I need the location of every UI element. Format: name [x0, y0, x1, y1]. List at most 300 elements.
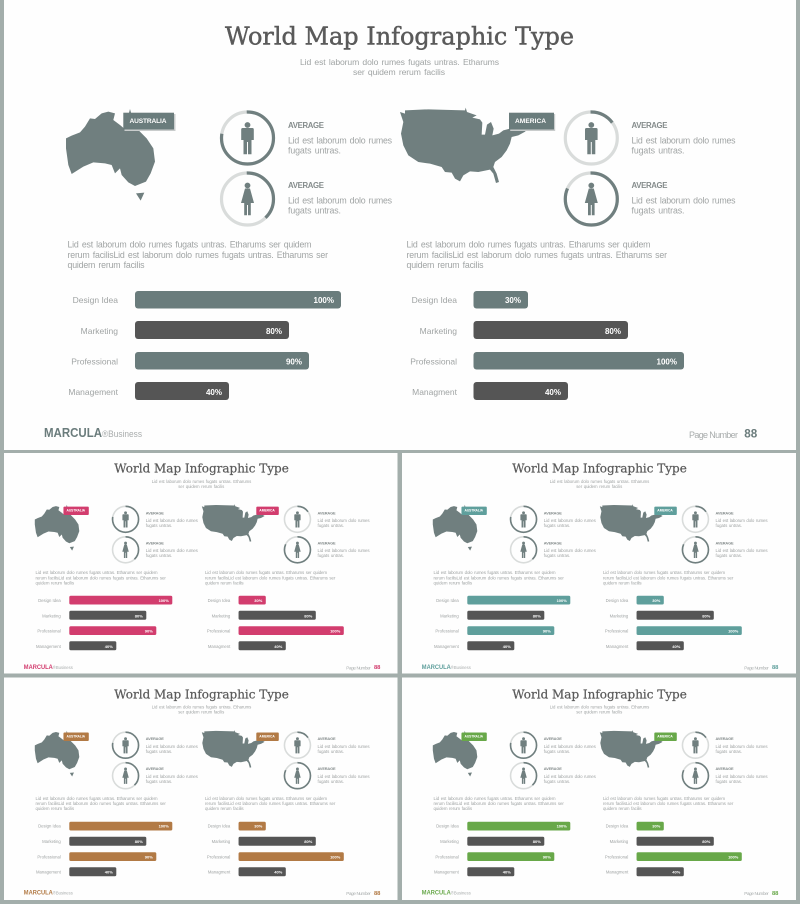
bar chart: America: 30% [254, 824, 263, 829]
bar chart: America: Managment [208, 870, 231, 875]
bar chart: America: Design Idea [412, 295, 457, 305]
paragraph: America: quidem rerum facilis [205, 806, 244, 811]
label: America: AMERICA [657, 509, 673, 513]
paragraph: America: rerum facilisLid est laborum dolo rumes fugats untras. Etharums ser [406, 250, 667, 260]
ring: female average Australia [113, 763, 139, 789]
text: female average Australia: AVERAGE [288, 181, 324, 190]
bar chart: America: 30% [652, 824, 661, 829]
text: female average Australia: AVERAGE [146, 766, 164, 771]
map: America [202, 730, 265, 768]
subtitle [152, 705, 251, 715]
paragraph: America: quidem rerum facilis [205, 580, 244, 585]
bar chart: America: 80% [605, 327, 621, 336]
text: male average America: AVERAGE [716, 510, 734, 515]
bar chart: Australia: Management [434, 644, 460, 649]
bar chart: America: 80% [304, 613, 313, 618]
text: male average America [318, 510, 370, 528]
subtitle: ser quidem rerum facilis [178, 484, 224, 489]
bar chart: America: Managment [606, 644, 629, 649]
text: male average America: AVERAGE [716, 736, 734, 741]
bar chart: Australia: Professional [37, 629, 61, 634]
paragraph: Australia: rerum facilisLid est laborum dolo rumes fugats untras. Etharums ser [36, 801, 166, 806]
bar chart: Australia: 40% [503, 870, 511, 875]
paragraph: Australia: quidem rerum facilis [36, 580, 75, 585]
text: male average Australia: AVERAGE [288, 121, 324, 130]
paragraph: Australia [68, 240, 328, 270]
bar chart: Australia: Marketing [81, 326, 118, 336]
bar chart: Australia: 80% [135, 839, 143, 844]
bar chart: Australia: 40% [503, 644, 511, 649]
map: Australia [66, 109, 155, 201]
bar chart: Australia: 90% [145, 629, 153, 634]
slide: main grey version [44, 22, 758, 441]
paragraph: America: quidem rerum facilis [603, 580, 642, 585]
text: female average America: AVERAGE [716, 540, 734, 545]
subtitle [152, 479, 251, 489]
paragraph: America: Lid est laborum dolo rumes fugats untras. Etharums ser quidem [205, 796, 327, 801]
bar chart: Australia: 80% [533, 839, 541, 844]
paragraph: Australia: rerum facilisLid est laborum dolo rumes fugats untras. Etharums ser [36, 575, 166, 580]
bar chart: America: 30% [505, 296, 521, 305]
text: male average Australia [544, 736, 597, 754]
footer page number: Page Number [689, 430, 738, 440]
title: World Map Infographic Type [512, 687, 687, 701]
paragraph: America [205, 796, 336, 811]
text: male average America [318, 736, 370, 754]
paragraph: Australia: rerum facilisLid est laborum dolo rumes fugats untras. Etharums ser [68, 250, 328, 260]
label: America [256, 733, 279, 741]
ring: female average America [284, 763, 310, 789]
footer brand: ®Business [53, 664, 73, 670]
bar chart: America: 40% [672, 644, 681, 649]
bar chart: America: 100% [728, 629, 739, 634]
subtitle: ser quidem rerum facilis [576, 710, 622, 715]
ring: female average America [682, 763, 708, 789]
text: male average Australia: fugats untras. [544, 749, 570, 754]
text: male average America: AVERAGE [318, 510, 336, 515]
ring: male average America [284, 506, 310, 532]
slide: pink version [24, 462, 381, 671]
paragraph: America: quidem rerum facilis [603, 806, 642, 811]
paragraph: Australia: rerum facilisLid est laborum dolo rumes fugats untras. Etharums ser [434, 575, 564, 580]
text: male average Australia [146, 510, 199, 528]
label: America [654, 733, 677, 741]
bar chart: Australia: Marketing [42, 613, 61, 618]
bar chart: Australia [36, 596, 172, 650]
map: America [400, 108, 526, 183]
bar chart: Australia: 100% [159, 598, 169, 603]
text: female average America: AVERAGE [716, 766, 734, 771]
title: World Map Infographic Type [114, 462, 289, 476]
label: Australia [63, 733, 89, 741]
text: female average America: Lid est laborum dolo rumes [318, 774, 370, 779]
text: female average Australia [544, 540, 597, 558]
paragraph: America: Lid est laborum dolo rumes fugats untras. Etharums ser quidem [205, 570, 327, 575]
label: America [256, 507, 279, 515]
footer page number [744, 665, 779, 671]
text: female average Australia: Lid est laborum dolo rumes [288, 196, 393, 206]
bar chart: America: Design Idea [208, 598, 231, 603]
subtitle: Lid est laborum dolo rumes fugats untras. Etharums [152, 705, 251, 710]
text: female average America: fugats untras. [632, 206, 684, 216]
text: female average America: AVERAGE [632, 181, 668, 190]
ring: male average Australia [113, 506, 139, 532]
bar chart: America: 80% [702, 613, 711, 618]
label: Australia [461, 507, 487, 515]
subtitle: ser quidem rerum facilis [576, 484, 622, 489]
text: female average Australia: AVERAGE [146, 540, 164, 545]
bar chart: Australia: Management [36, 870, 62, 875]
text: female average Australia [146, 540, 199, 558]
bar chart: America: 40% [274, 870, 283, 875]
ring: female average America [284, 537, 310, 563]
bar chart: America: 80% [304, 839, 313, 844]
subtitle: Lid est laborum dolo rumes fugats untras. Etharums [152, 479, 251, 484]
text: male average Australia [544, 510, 597, 528]
text: female average America [716, 766, 768, 784]
footer brand [24, 890, 73, 897]
panel: green slide background [402, 678, 796, 900]
text: male average Australia: Lid est laborum dolo rumes [544, 744, 597, 749]
label: Australia: AUSTRALIA [465, 509, 484, 513]
map: Australia [35, 731, 79, 777]
bar chart: America: Marketing [212, 839, 231, 844]
paragraph: America [603, 570, 734, 585]
footer brand [24, 664, 73, 671]
bar chart: America: Managment [208, 644, 231, 649]
text: female average America: fugats untras. [318, 779, 344, 784]
text: female average Australia [146, 766, 199, 784]
footer page number: Page Number [346, 891, 371, 896]
bar chart: America: Design Idea [208, 824, 231, 829]
bar chart: America: 100% [330, 629, 341, 634]
bar chart: Australia: Design Idea [38, 824, 61, 829]
paragraph: America [603, 796, 734, 811]
bar chart: America: Marketing [420, 326, 457, 336]
text: male average Australia [288, 121, 393, 156]
text: male average Australia: AVERAGE [146, 736, 164, 741]
label: Australia: AUSTRALIA [465, 735, 484, 739]
map: America [202, 504, 265, 542]
text: male average America: fugats untras. [716, 749, 742, 754]
text: male average America: fugats untras. [632, 146, 684, 156]
ring: male average America [682, 506, 708, 532]
text: male average America: fugats untras. [318, 523, 344, 528]
subtitle [550, 479, 649, 489]
ring: male average America [682, 732, 708, 758]
bar chart: Australia: Design Idea [436, 824, 459, 829]
text: female average Australia: fugats untras. [146, 553, 172, 558]
ring: male average America [284, 732, 310, 758]
map: Australia [35, 505, 79, 551]
text: male average America: Lid est laborum dolo rumes [632, 136, 736, 146]
bar chart: Australia: 90% [543, 629, 551, 634]
paragraph: Australia: quidem rerum facilis [36, 806, 75, 811]
bar chart: Australia: Management [68, 387, 119, 397]
bar chart: Australia [434, 596, 570, 650]
bar chart: America: 40% [545, 388, 561, 397]
paragraph: Australia [434, 796, 564, 811]
bar chart: Australia: 40% [105, 644, 113, 649]
bar chart: Australia: 80% [266, 327, 282, 336]
panel: teal slide background [402, 453, 796, 674]
text: female average Australia: AVERAGE [544, 766, 562, 771]
text: male average America [716, 510, 768, 528]
text: male average Australia: Lid est laborum dolo rumes [146, 518, 199, 523]
text: female average Australia: fugats untras. [288, 206, 341, 216]
bar chart: Australia: 100% [557, 824, 567, 829]
footer page number: 88 [772, 665, 779, 671]
paragraph: Australia: quidem rerum facilis [434, 806, 473, 811]
map: Australia [433, 731, 477, 777]
text: male average Australia: Lid est laborum dolo rumes [288, 136, 393, 146]
bar chart: Australia [434, 822, 570, 876]
text: female average Australia: fugats untras. [146, 779, 172, 784]
bar chart: America: 30% [254, 598, 263, 603]
paragraph: Australia: Lid est laborum dolo rumes fugats untras. Etharums ser quidem [68, 240, 312, 250]
bar chart: America: Design Idea [606, 824, 629, 829]
footer page number: 88 [772, 891, 779, 897]
paragraph: America: quidem rerum facilis [406, 260, 484, 270]
map: America [600, 730, 663, 768]
ring: female average Australia [511, 763, 537, 789]
panel: brown slide background [4, 678, 398, 900]
label: America [654, 507, 677, 515]
text: female average America: Lid est laborum dolo rumes [318, 548, 370, 553]
bar chart: America: Marketing [212, 613, 231, 618]
footer brand [422, 664, 471, 671]
bar chart: America: Managment [606, 870, 629, 875]
footer brand: MARCULA [24, 890, 53, 897]
bar chart: America: Professional [410, 356, 457, 366]
text: male average Australia: fugats untras. [146, 749, 172, 754]
footer page number [346, 891, 381, 897]
paragraph: Australia [434, 570, 564, 585]
bar chart: Australia: 40% [206, 388, 222, 397]
text: female average Australia [288, 181, 393, 216]
bar chart: Australia: Management [36, 644, 62, 649]
paragraph: America: Lid est laborum dolo rumes fugats untras. Etharums ser quidem [603, 796, 725, 801]
text: male average America: Lid est laborum dolo rumes [716, 744, 768, 749]
text: male average America [716, 736, 768, 754]
text: female average Australia: Lid est laborum dolo rumes [544, 548, 597, 553]
ring: female average America [682, 537, 708, 563]
bar chart: America: 40% [672, 870, 681, 875]
footer page number: Page Number [744, 665, 769, 670]
bar chart: America: 100% [728, 854, 739, 859]
title: World Map Infographic Type [114, 687, 289, 701]
paragraph: Australia [36, 570, 166, 585]
text: male average Australia: AVERAGE [146, 510, 164, 515]
label: America: AMERICA [657, 735, 673, 739]
text: female average America: AVERAGE [318, 540, 336, 545]
text: female average Australia: Lid est laborum dolo rumes [146, 548, 199, 553]
panel: main slide background [4, 0, 796, 450]
bar chart: Australia: 90% [543, 854, 551, 859]
footer brand: MARCULA [422, 890, 451, 897]
bar chart: Australia: 90% [286, 358, 302, 366]
title: World Map Infographic Type [225, 22, 574, 50]
ring: female average Australia [222, 173, 274, 225]
ring: female average Australia [511, 537, 537, 563]
bar chart: Australia [68, 291, 341, 400]
bar chart: Australia: Professional [37, 854, 61, 859]
text: male average Australia: fugats untras. [146, 523, 172, 528]
label: America [509, 113, 555, 131]
bar chart: America: Design Idea [606, 598, 629, 603]
ring: male average Australia [511, 506, 537, 532]
bar chart: America: Professional [207, 629, 230, 634]
text: male average Australia: fugats untras. [288, 146, 341, 156]
footer page number: Page Number [744, 891, 769, 896]
paragraph: America: rerum facilisLid est laborum dolo rumes fugats untras. Etharums ser [205, 575, 336, 580]
text: female average America: Lid est laborum dolo rumes [632, 196, 736, 206]
bar chart: Australia: Marketing [440, 839, 459, 844]
text: female average Australia: Lid est laborum dolo rumes [544, 774, 597, 779]
text: female average Australia: fugats untras. [544, 779, 570, 784]
ring: male average Australia [511, 732, 537, 758]
label: America: AMERICA [259, 735, 275, 739]
paragraph: America: rerum facilisLid est laborum dolo rumes fugats untras. Etharums ser [603, 801, 734, 806]
bar chart: America: Professional [605, 629, 628, 634]
bar chart: Australia: Professional [435, 629, 459, 634]
bar chart: America: 40% [274, 644, 283, 649]
footer brand: MARCULA [422, 664, 451, 671]
bar chart: Australia: Professional [71, 356, 118, 366]
text: female average America: fugats untras. [318, 553, 344, 558]
paragraph: Australia: Lid est laborum dolo rumes fugats untras. Etharums ser quidem [36, 570, 158, 575]
map: Australia [433, 505, 477, 551]
bar chart: Australia: 100% [159, 824, 169, 829]
footer brand: ®Business [451, 664, 471, 670]
bar chart: America [207, 822, 344, 876]
text: female average America: Lid est laborum dolo rumes [716, 774, 768, 779]
text: male average Australia: fugats untras. [544, 523, 570, 528]
text: female average America [716, 540, 768, 558]
bar chart: America: 100% [330, 854, 341, 859]
map: America [600, 504, 663, 542]
ring: male average Australia [113, 732, 139, 758]
footer page number: 88 [374, 891, 381, 897]
subtitle [550, 705, 649, 715]
bar chart: America: Marketing [610, 613, 629, 618]
footer brand: MARCULA [24, 664, 53, 671]
footer brand: MARCULA [44, 425, 103, 440]
label: Australia: AUSTRALIA [130, 118, 167, 125]
bar chart: Australia: Design Idea [38, 598, 61, 603]
bar chart: Australia: 80% [533, 613, 541, 618]
text: male average America: AVERAGE [318, 736, 336, 741]
text: female average Australia: AVERAGE [544, 540, 562, 545]
bar chart: Australia: Professional [435, 854, 459, 859]
text: male average Australia [146, 736, 199, 754]
text: female average America: fugats untras. [716, 779, 742, 784]
text: female average America [318, 540, 370, 558]
paragraph: Australia [36, 796, 166, 811]
footer brand [422, 890, 471, 897]
bar chart: America [605, 596, 742, 650]
title: World Map Infographic Type [512, 462, 687, 476]
text: female average America: Lid est laborum dolo rumes [716, 548, 768, 553]
paragraph: Australia: Lid est laborum dolo rumes fugats untras. Etharums ser quidem [434, 570, 556, 575]
bar chart: America: Managment [412, 387, 458, 397]
label: America: AMERICA [515, 118, 546, 125]
paragraph: Australia: quidem rerum facilis [68, 260, 145, 270]
subtitle: Lid est laborum dolo rumes fugats untras. Etharums [550, 705, 649, 710]
label: Australia: AUSTRALIA [67, 509, 86, 513]
paragraph: America [205, 570, 336, 585]
ring: female average Australia [113, 537, 139, 563]
footer page number [346, 665, 381, 671]
label: Australia [461, 733, 487, 741]
bar chart: Australia: 100% [557, 598, 567, 603]
footer brand: ®Business [102, 429, 142, 439]
bar chart: America [410, 291, 684, 400]
bar chart: America: 80% [702, 839, 711, 844]
paragraph: America: Lid est laborum dolo rumes fugats untras. Etharums ser quidem [603, 570, 725, 575]
text: female average Australia: Lid est laborum dolo rumes [146, 774, 199, 779]
ring: male average America [565, 112, 617, 164]
text: male average Australia: AVERAGE [544, 736, 562, 741]
ring: female average America [565, 173, 617, 225]
bar chart: Australia: 80% [135, 613, 143, 618]
label: Australia [63, 507, 89, 515]
bar chart: Australia: 40% [105, 870, 113, 875]
text: male average Australia: Lid est laborum dolo rumes [544, 518, 597, 523]
footer page number [744, 891, 779, 897]
text: female average America: fugats untras. [716, 553, 742, 558]
slide: teal version [422, 462, 779, 671]
label: Australia [123, 113, 176, 131]
bar chart: America: 100% [657, 358, 677, 366]
bar chart: Australia: Management [434, 870, 460, 875]
bar chart: America: Marketing [610, 839, 629, 844]
text: male average America: fugats untras. [318, 749, 344, 754]
subtitle: ser quidem rerum facilis [178, 710, 224, 715]
text: male average America: fugats untras. [716, 523, 742, 528]
bar chart: Australia: Marketing [440, 613, 459, 618]
slide: brown version [24, 687, 381, 897]
subtitle: Lid est laborum dolo rumes fugats untras. Etharums [300, 57, 499, 67]
text: female average America [632, 181, 736, 216]
footer page number [689, 429, 758, 441]
footer brand: ®Business [53, 890, 73, 896]
bar chart: Australia: Design Idea [436, 598, 459, 603]
footer brand: ®Business [451, 890, 471, 896]
text: female average America: AVERAGE [318, 766, 336, 771]
paragraph: Australia: quidem rerum facilis [434, 580, 473, 585]
paragraph: America: rerum facilisLid est laborum dolo rumes fugats untras. Etharums ser [205, 801, 336, 806]
text: male average America: AVERAGE [632, 121, 668, 130]
bar chart: Australia: 100% [314, 296, 334, 305]
bar chart: America [605, 822, 742, 876]
footer page number: 88 [374, 665, 381, 671]
text: male average America: Lid est laborum dolo rumes [318, 744, 370, 749]
bar chart: Australia [36, 822, 172, 876]
bar chart: America [207, 596, 344, 650]
footer page number: 88 [744, 429, 758, 441]
text: male average Australia: Lid est laborum dolo rumes [146, 744, 199, 749]
bar chart: Australia: 90% [145, 854, 153, 859]
bar chart: Australia: Marketing [42, 839, 61, 844]
paragraph: America [406, 240, 667, 270]
text: male average America: Lid est laborum dolo rumes [318, 518, 370, 523]
slide: green version [422, 687, 779, 897]
subtitle: Lid est laborum dolo rumes fugats untras. Etharums [550, 479, 649, 484]
subtitle: ser quidem rerum facilis [353, 67, 445, 77]
paragraph: Australia: rerum facilisLid est laborum dolo rumes fugats untras. Etharums ser [434, 801, 564, 806]
text: female average Australia: fugats untras. [544, 553, 570, 558]
